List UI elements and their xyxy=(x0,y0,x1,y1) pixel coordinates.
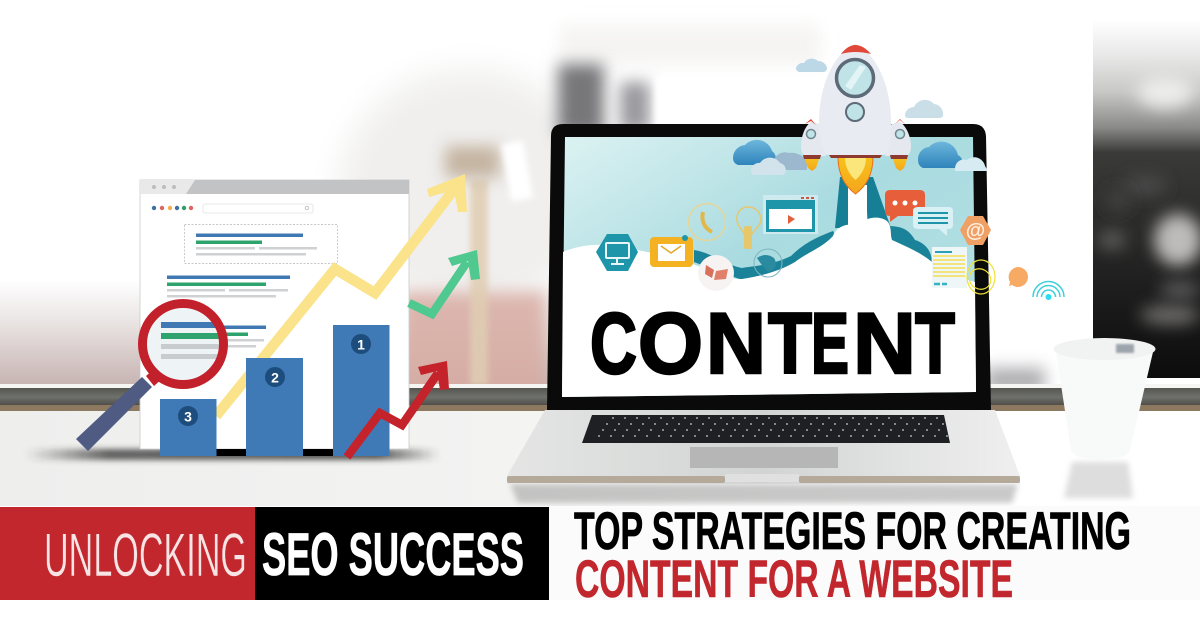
yellow growth arrow xyxy=(216,174,467,416)
headline word on screen: N xyxy=(706,296,766,392)
banner black segment xyxy=(255,507,549,600)
bottom fade strip xyxy=(549,506,1200,600)
icon: orange balloon xyxy=(1009,267,1028,287)
icon: document xyxy=(932,247,967,288)
banner red segment xyxy=(0,507,255,600)
icon: globe xyxy=(754,249,782,277)
rocket body xyxy=(819,44,891,155)
headline word on screen: C xyxy=(590,296,637,392)
bar: rank 3: 3 xyxy=(184,408,192,424)
icon: at sign hexagon: @ xyxy=(966,220,985,242)
rocket windows xyxy=(836,60,874,96)
title banner xyxy=(0,507,549,600)
bar chart xyxy=(160,325,390,456)
second result xyxy=(167,276,290,298)
search bar xyxy=(152,204,313,213)
side boosters xyxy=(801,119,911,171)
laptop xyxy=(507,124,1020,503)
icon: envelope xyxy=(650,235,693,267)
laptop bezel xyxy=(547,124,991,410)
rocket launch xyxy=(733,44,988,194)
browser window xyxy=(140,180,409,449)
shadow beneath chart xyxy=(25,449,440,460)
browser title bar xyxy=(140,180,409,194)
icon: monitor hexagon xyxy=(596,234,638,271)
headline word on screen: T xyxy=(915,296,955,392)
subtitle xyxy=(574,502,1131,609)
window ledge xyxy=(0,384,1200,412)
teal ribbon xyxy=(694,226,932,280)
icon: speech bubble red xyxy=(885,190,925,222)
green growth arrow xyxy=(409,250,480,314)
headline word on screen: N xyxy=(853,296,916,392)
bar: rank 1: 1 xyxy=(357,336,365,352)
white cloud xyxy=(562,218,976,397)
icon: yellow orbits xyxy=(965,260,995,294)
headline word on screen: T xyxy=(768,296,812,392)
laptop base xyxy=(507,410,1020,503)
glass of water xyxy=(1054,338,1156,498)
red growth arrow xyxy=(347,361,449,457)
bar: rank 3 xyxy=(160,399,216,456)
bar: rank 2 xyxy=(246,358,303,456)
banner bold words: SEO SUCCESS xyxy=(262,521,524,588)
third result xyxy=(167,326,266,348)
icon: light bulb xyxy=(737,207,761,249)
right dark blurred block xyxy=(1093,20,1200,378)
keyboard xyxy=(582,415,950,443)
blurred room background xyxy=(0,28,1200,384)
content icons xyxy=(596,190,1064,300)
icon: phone xyxy=(688,204,726,240)
table top xyxy=(0,411,1200,506)
icon: open book xyxy=(698,255,734,291)
icon: speech bubble lines xyxy=(913,207,953,236)
featured result xyxy=(184,224,338,264)
headline word on screen: E xyxy=(811,296,849,392)
icon: video window xyxy=(763,195,818,234)
icon: wifi xyxy=(1033,281,1064,300)
bar: rank 2: 2 xyxy=(271,370,279,386)
laptop screen xyxy=(562,137,976,397)
trackpad xyxy=(690,447,838,468)
banner thin word: UNLOCKING xyxy=(44,521,247,589)
smoke trails xyxy=(835,177,891,228)
headline word on screen: O xyxy=(638,296,703,392)
magnifying glass xyxy=(76,304,224,451)
sky clouds xyxy=(733,59,988,175)
bar: rank 1 xyxy=(333,325,390,456)
icon: at sign hexagon xyxy=(960,216,991,245)
main flame xyxy=(838,157,873,194)
